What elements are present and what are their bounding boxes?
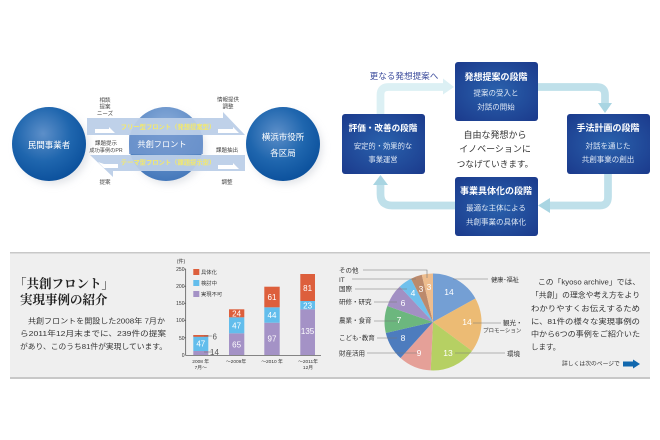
pie chart: projects by field: [339, 266, 522, 370]
circle: co-creation front: 共創フロント: [137, 140, 187, 149]
x labels: [192, 358, 318, 371]
box: idea proposal stage: 対話の開始: [477, 102, 515, 112]
heading: results introduction: 「共創フロント」: [14, 276, 114, 291]
box: evaluation stage: 安定的・効果的な: [354, 142, 412, 150]
pie values: [397, 282, 472, 358]
leader lines: [352, 270, 505, 353]
bar: 2009: 65: [232, 340, 242, 350]
text block: kyoso archive: 「共創」の理念や考え方をより: [531, 290, 640, 300]
next page note: 詳しくは次のページで: [562, 360, 620, 368]
circle: private businesses: 民間事業者: [28, 140, 71, 150]
arrow: to further proposals: [380, 78, 454, 114]
arrow: to project realization: [538, 174, 608, 213]
pie labels: 国際: [339, 284, 352, 293]
arrow: free-type front: [87, 112, 245, 135]
pie labels: 農業・食育: [339, 316, 372, 324]
pie values: 6: [401, 298, 406, 308]
small labels: 提案: [99, 178, 111, 186]
bar chart: proposals by period: [176, 258, 321, 371]
x labels: 2008 年: [192, 358, 209, 365]
small labels: ニーズ: [97, 110, 114, 118]
text block: results introduction: があり、このうち81件が実現しています。: [20, 342, 167, 351]
next page note: [562, 360, 640, 368]
box: method planning stage: 手法計画の段階: [576, 122, 640, 133]
legend: [193, 268, 223, 298]
text block: results introduction: [20, 316, 167, 351]
axes: 100: [176, 318, 185, 324]
pie labels: 研修・研究: [339, 297, 372, 306]
arrow: to method planning: [537, 87, 612, 113]
center message: イノベーションに: [459, 144, 531, 154]
bar: 2008: 14: [210, 348, 219, 357]
bar: 2008: 6: [212, 332, 218, 342]
bar: 2010: [264, 287, 280, 355]
circle shadows: [17, 112, 322, 184]
pie labels: 環境: [507, 349, 520, 358]
bar: 2010: 44: [268, 311, 277, 320]
panel: co-creation front diagram: [12, 96, 322, 186]
pie labels: 健康･福祉: [491, 276, 519, 284]
bar: 2011: [300, 274, 315, 355]
circle: Yokohama city office: 各区局: [270, 148, 296, 158]
pie labels: 財産活用: [339, 348, 365, 358]
text block: kyoso archive: [531, 278, 640, 352]
small labels: 課題提示: [95, 139, 117, 147]
pie values: 9: [417, 348, 422, 358]
heading: results introduction: 実現事例の紹介: [20, 292, 108, 307]
box: evaluation stage: 事業運営: [368, 155, 398, 164]
box: project realization stage: 共創事業の具体化: [466, 216, 526, 226]
pie values: 3: [419, 284, 424, 294]
panel: innovation cycle: [342, 62, 650, 236]
small labels: 課題抽出: [216, 146, 238, 154]
text block: kyoso archive: 中から6つの事例をご紹介いた: [531, 328, 640, 338]
circle: co-creation front: [129, 107, 203, 181]
small labels: 調整: [222, 102, 234, 110]
pie values: 3: [427, 282, 432, 292]
box: method planning stage: 共創事業の創出: [582, 154, 634, 164]
x labels: 7月〜: [195, 365, 207, 371]
arrow: theme-type front: テーマ型フロント（課題提示型）: [121, 158, 215, 166]
bar: 2011: 135: [301, 327, 315, 336]
small labels: 情報提供: [217, 96, 239, 104]
box: idea proposal stage: [455, 62, 538, 121]
small labels: 調整: [221, 178, 233, 186]
icon: blue arrow: [623, 360, 640, 368]
small labels: 成功事例のPR: [89, 146, 123, 154]
circle: Yokohama city office: [246, 107, 320, 181]
small labels: [89, 96, 239, 186]
x labels: 〜2011年: [298, 358, 318, 365]
legend: 具体化: [201, 268, 218, 276]
center message: つなげていきます。: [457, 159, 533, 169]
small labels: 相談: [99, 96, 111, 104]
text block: kyoso archive: に、81件の様々な実現事例の: [531, 316, 640, 326]
x labels: 〜2009年: [226, 358, 246, 365]
box: project realization stage: 最適な主体による: [466, 202, 526, 212]
pie values: 8: [401, 333, 406, 343]
axes: [176, 258, 321, 359]
bar: 2010: 61: [268, 293, 277, 302]
pie labels: [339, 266, 522, 358]
panel: results band background: [10, 252, 650, 379]
text block: kyoso archive: します。: [531, 342, 560, 352]
box: evaluation stage: [342, 114, 425, 174]
bar: 2011: 81: [303, 284, 313, 293]
circle: Yokohama city office: 横浜市役所: [262, 132, 305, 142]
bar: 2008: 47: [196, 340, 206, 348]
label: further proposals: 更なる発想提案へ: [370, 70, 439, 81]
bar: 2011: 23: [303, 302, 313, 310]
pie values: 14: [444, 287, 454, 297]
center message: 自由な発想から: [463, 129, 527, 140]
text block: results introduction: ら2011年12月末までに、239件の提案: [20, 329, 167, 338]
axes: 0: [182, 353, 185, 359]
bar: 2010: 97: [268, 334, 277, 344]
bar: 2009: 47: [232, 322, 242, 330]
legend: 実現不可: [201, 290, 223, 298]
box: project realization stage: [455, 177, 538, 236]
axes: 150: [176, 301, 185, 307]
box: project realization stage: 事業具体化の段階: [460, 185, 532, 196]
bar: 2008: [193, 332, 219, 357]
bar: 2009: 24: [232, 309, 242, 318]
text block: kyoso archive: わかりやすくお伝えするため: [531, 303, 640, 313]
pie values: 4: [411, 288, 416, 298]
legend: 検討中: [201, 279, 217, 287]
small labels: 提案: [99, 102, 111, 110]
pie values: 14: [462, 317, 472, 327]
box: idea proposal stage: 発想提案の段階: [464, 71, 528, 82]
pie values: 13: [443, 348, 453, 358]
axes: 200: [176, 284, 185, 290]
pie labels: こども･教育: [339, 333, 375, 342]
box: evaluation stage: 評価・改善の段階: [349, 122, 418, 133]
x labels: 12月: [303, 365, 313, 371]
box: method planning stage: 対話を通じた: [586, 140, 630, 150]
center message: [457, 129, 533, 169]
arrow: to evaluation: [373, 175, 455, 206]
box: idea proposal stage: 提案の受入と: [474, 88, 518, 98]
bar: 2009: [229, 309, 244, 355]
arrow: theme-type front: [90, 155, 245, 177]
pie values: 7: [397, 315, 402, 325]
text block: kyoso archive: この「kyoso archive」では、: [538, 278, 640, 286]
x labels: 〜2010 年: [261, 358, 283, 365]
pie labels: その他: [339, 266, 359, 274]
heading: results introduction: [14, 276, 114, 307]
arrow: free-type front: フリー型フロント（発想提案型）: [121, 122, 215, 131]
axes: (件): [177, 258, 185, 265]
pie labels: IT: [339, 277, 345, 284]
text block: results introduction: 共創フロントを開設した2008年 7月か: [28, 316, 166, 326]
circle: private businesses: [12, 107, 86, 181]
pie labels: プロモーション: [483, 328, 522, 334]
axes: 250: [176, 267, 185, 273]
box: method planning stage: [567, 114, 650, 174]
axes: 50: [179, 336, 185, 342]
pie labels: 観光・: [503, 318, 522, 327]
